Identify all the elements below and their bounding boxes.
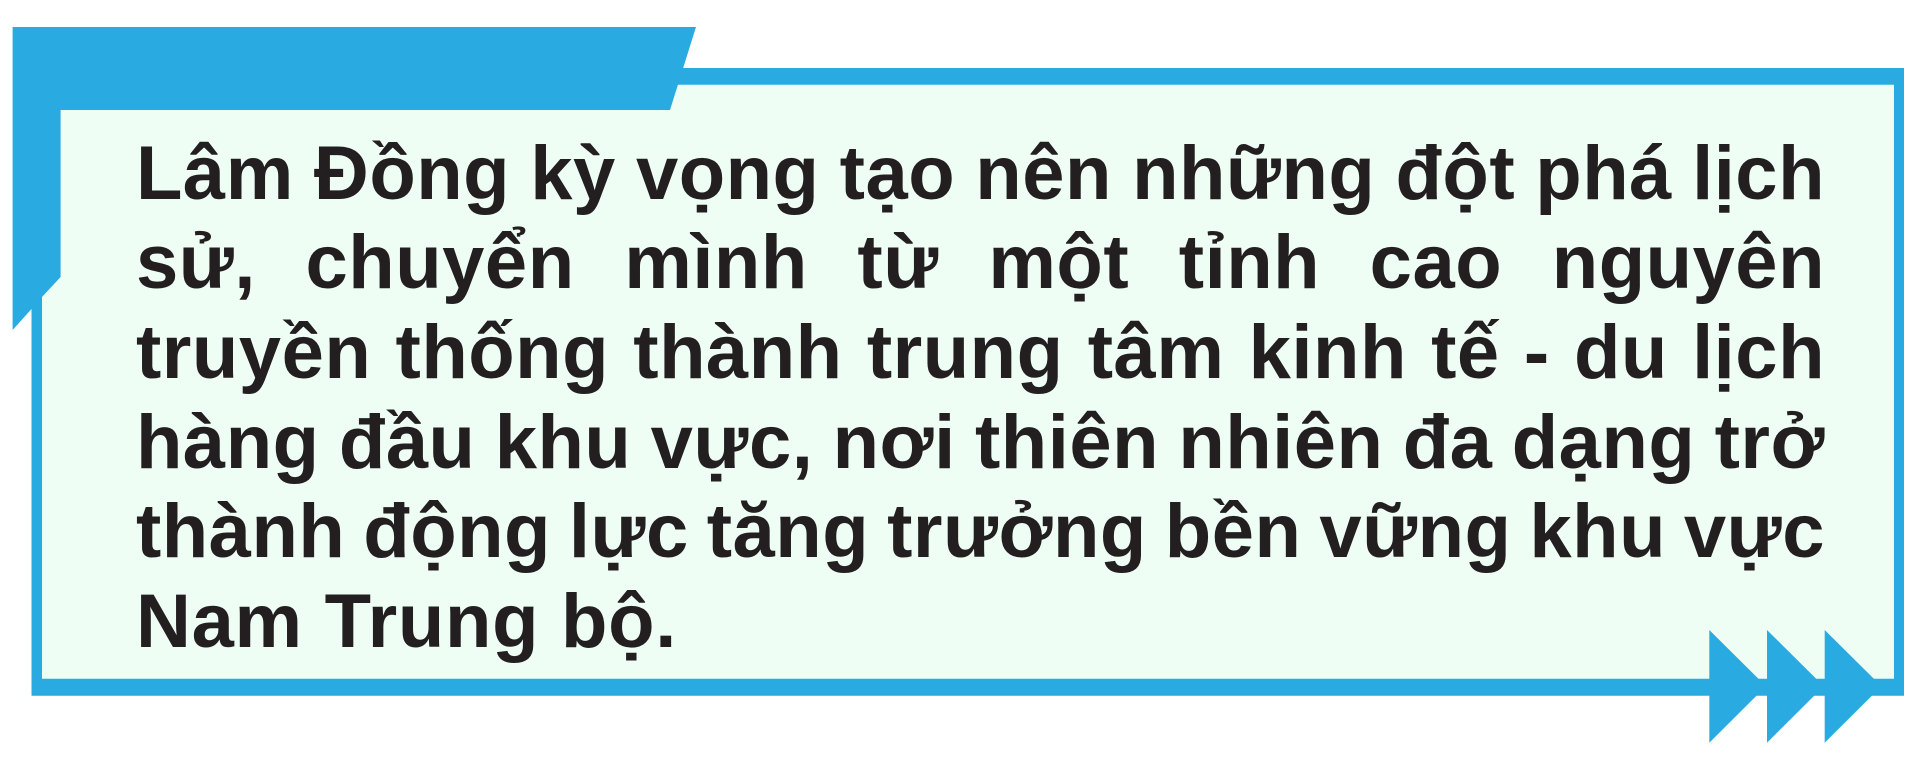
icon: triple arrow: [1709, 630, 1881, 743]
text block: callout text: truyền thống thành trung tâm kinh tế - du lịch: [136, 310, 1825, 395]
text block: callout text: sử, chuyển mình từ một tỉnh cao nguyên: [136, 220, 1825, 305]
corner tab: [13, 27, 696, 330]
text block: callout text: Nam Trung bộ.: [136, 579, 677, 664]
panel background: [36, 76, 1898, 686]
text block: callout text: [136, 131, 1825, 664]
text block: callout text: hàng đầu khu vực, nơi thiên nhiên đa dạng trở: [136, 400, 1825, 485]
text block: callout text: Lâm Đồng kỳ vọng tạo nên những đột phá lịch: [136, 131, 1825, 216]
text block: callout text: thành động lực tăng trưởng bền vững khu vực: [136, 489, 1825, 574]
panel border: [32, 68, 1904, 696]
